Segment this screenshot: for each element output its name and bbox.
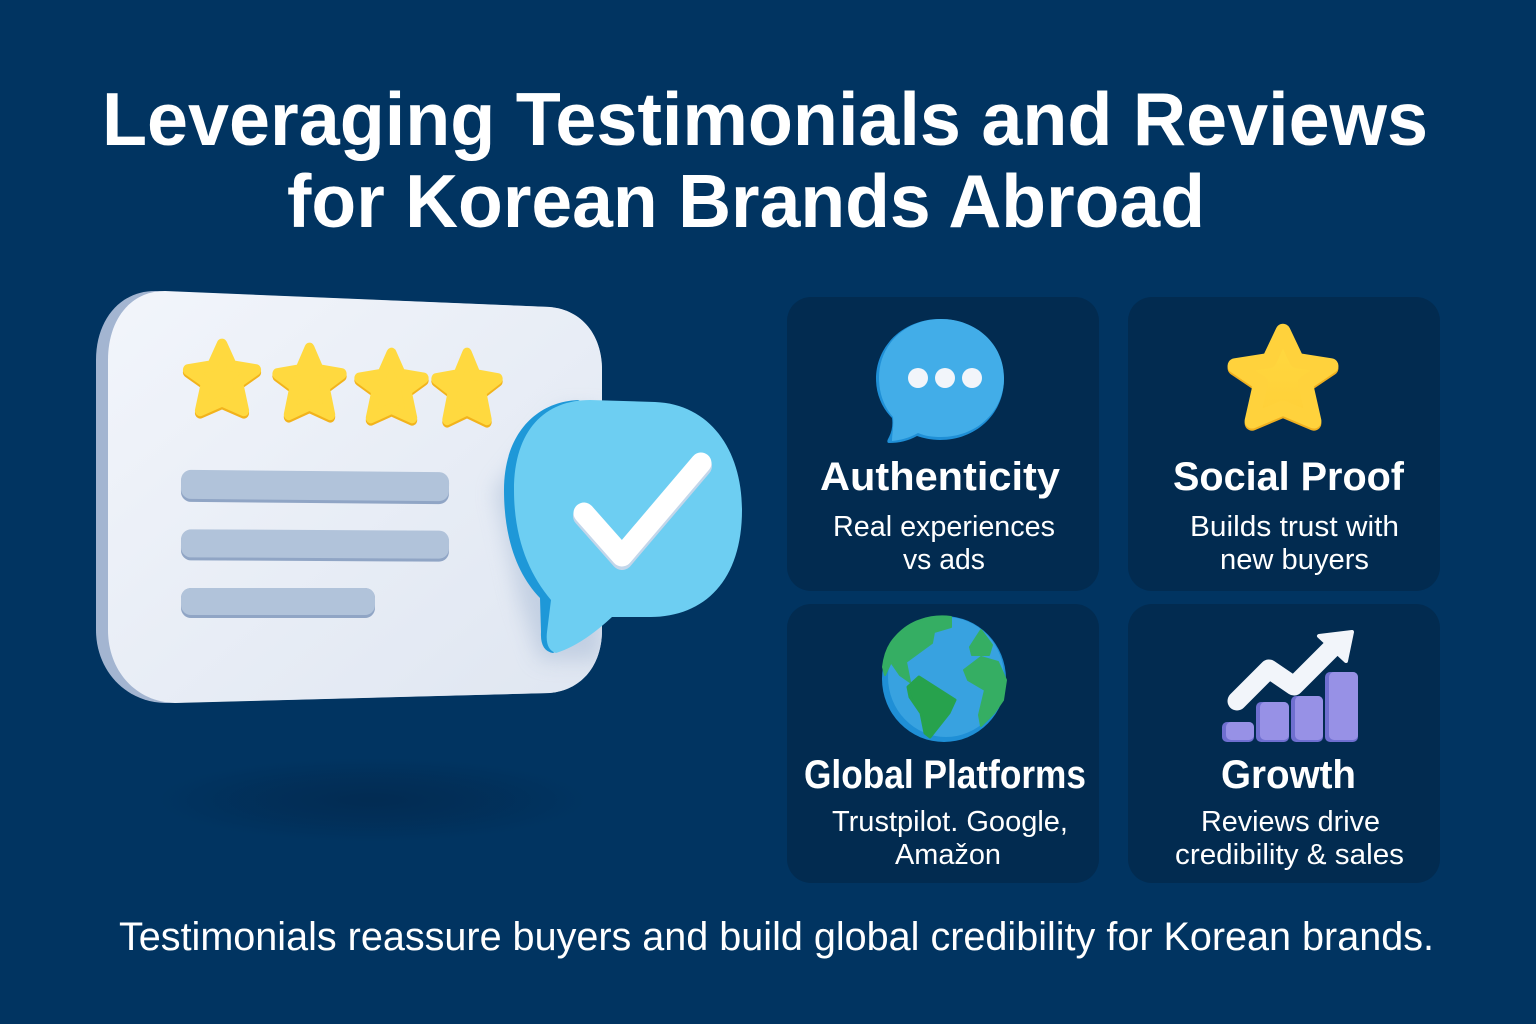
- bubble side: [504, 400, 735, 653]
- description: [1190, 511, 1399, 576]
- panel: Social Proof: [1128, 297, 1440, 591]
- description: Trustpilot. Google,: [832, 806, 1068, 838]
- title: for Korean Brands Abroad: [287, 159, 1205, 243]
- card side edge: [96, 291, 602, 703]
- description: Amažon: [895, 839, 1001, 871]
- card face: [108, 291, 602, 703]
- icon: star: [1235, 331, 1331, 423]
- panel: Global Platforms: [787, 604, 1099, 883]
- description: new buyers: [1220, 544, 1369, 576]
- continents: [883, 616, 951, 682]
- description: [1175, 806, 1404, 871]
- description: [833, 511, 1055, 576]
- title: Leveraging Testimonials and Reviews: [102, 77, 1428, 161]
- description: credibility & sales: [1175, 839, 1404, 871]
- description: vs ads: [903, 544, 985, 576]
- description: Reviews drive: [1201, 806, 1380, 838]
- heading: Growth: [1221, 753, 1356, 797]
- description: Real experiences: [833, 511, 1055, 543]
- icon: globe: [882, 616, 1006, 742]
- description: Builds trust with: [1190, 511, 1399, 543]
- panel: Growth: [1128, 604, 1440, 883]
- star rating: [188, 344, 498, 422]
- icon: speech bubble with check mark: [504, 400, 742, 653]
- text placeholder lines: [181, 470, 449, 618]
- title: [102, 77, 1428, 243]
- footer statement: Testimonials reassure buyers and build global credibility for Korean brands.: [119, 915, 1434, 959]
- illustration: review card: [96, 291, 602, 703]
- heading: Global Platforms: [804, 753, 1086, 797]
- icon: bar chart with arrow: [1222, 632, 1358, 742]
- panel: Authenticity: [787, 297, 1099, 591]
- icon: chat bubble: [876, 319, 1004, 443]
- bubble shadow on card: [491, 466, 602, 666]
- heading: Authenticity: [820, 455, 1061, 499]
- heading: Social Proof: [1173, 455, 1405, 499]
- floor shadow under review card: [157, 758, 587, 842]
- description: [832, 806, 1068, 871]
- bubble face: [514, 400, 742, 653]
- check mark: [584, 466, 701, 559]
